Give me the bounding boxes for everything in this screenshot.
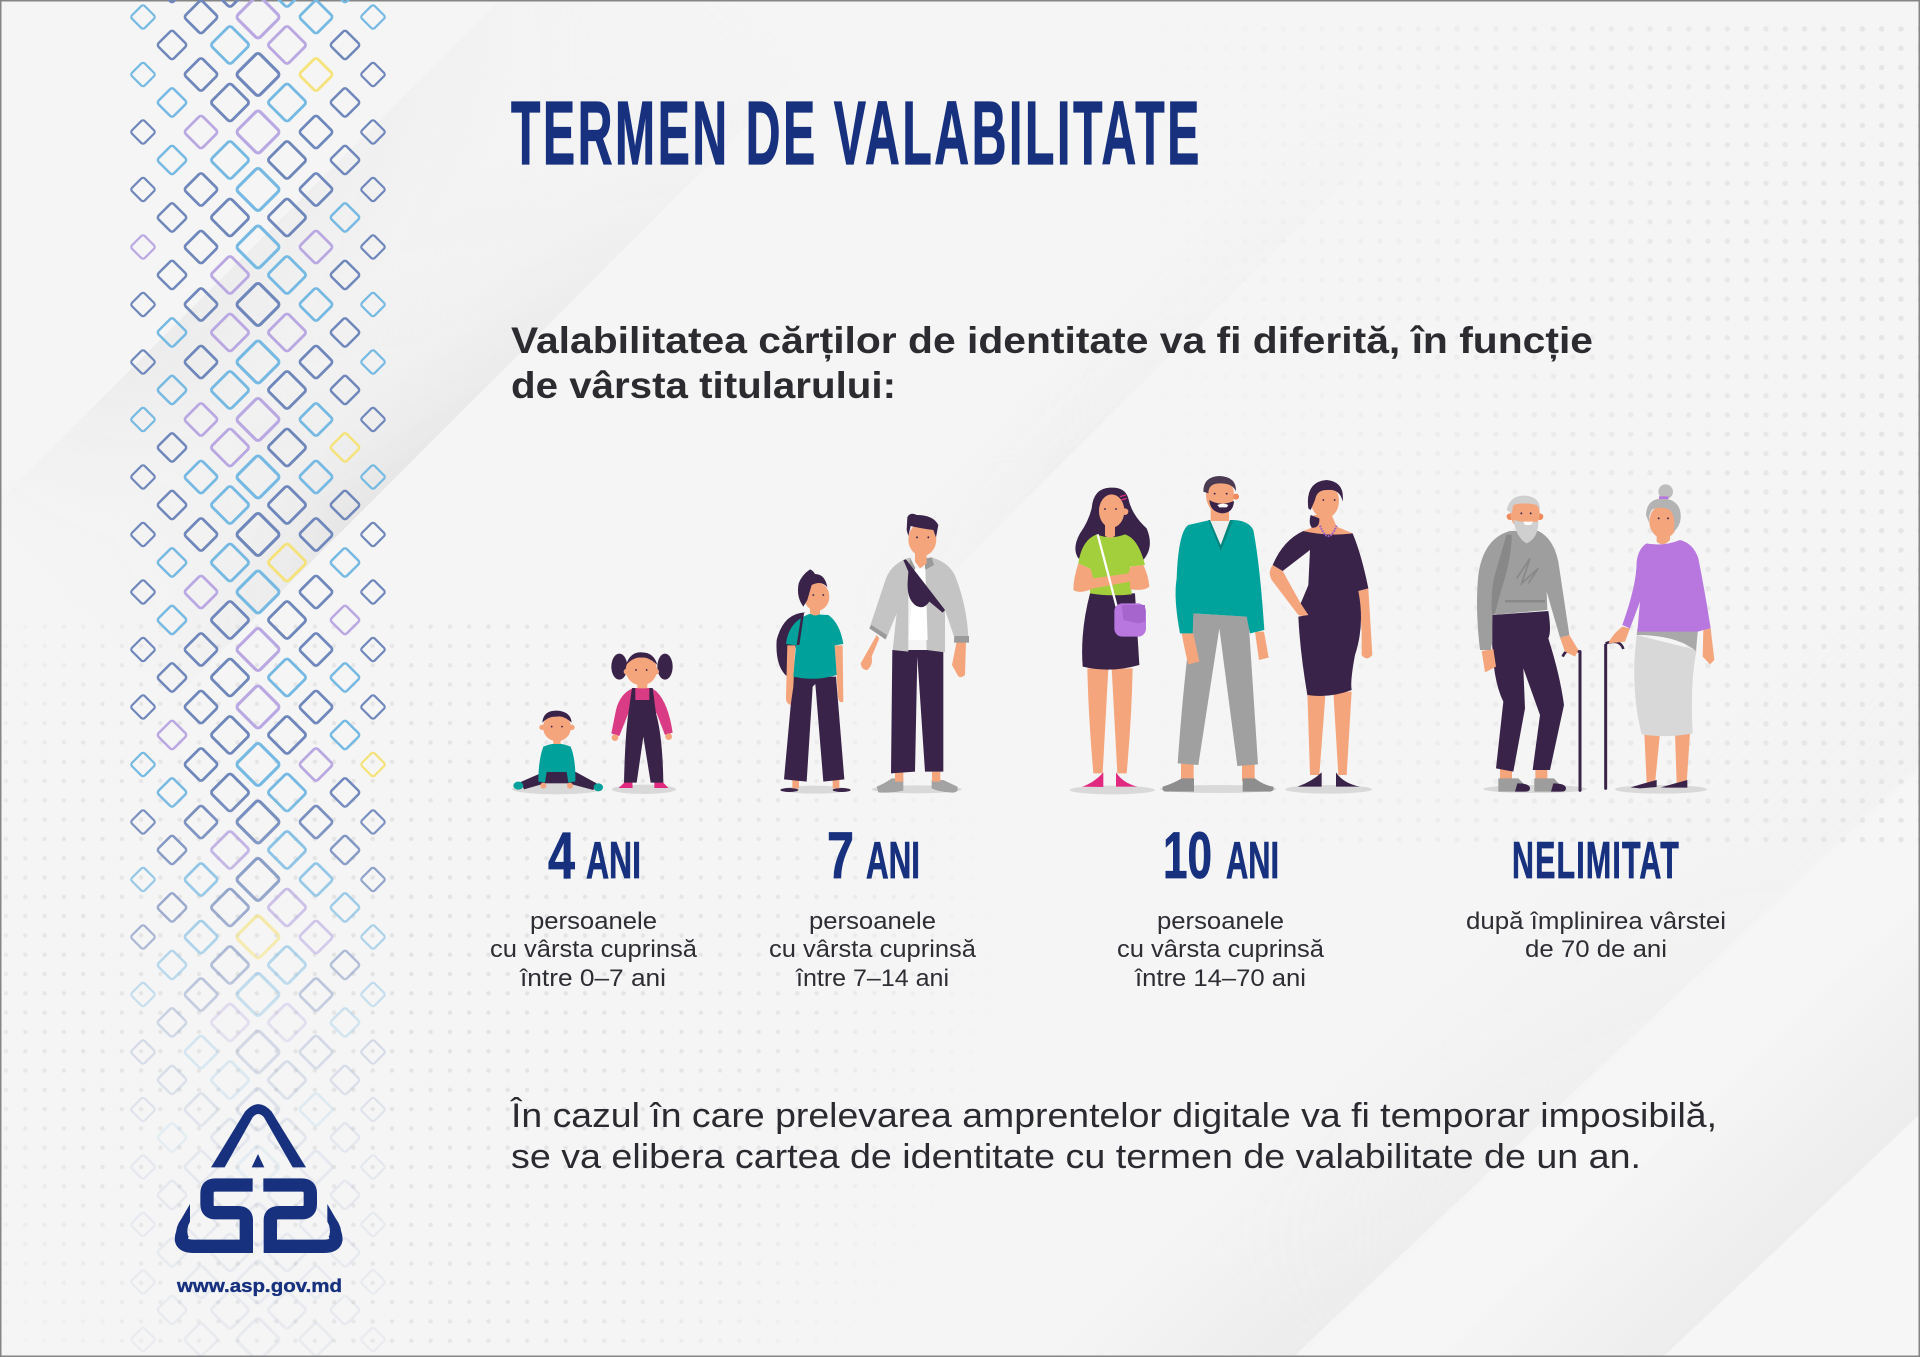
footnote: se va elibera cartea de identitate cu termen de valabilitate de un an.: [511, 1138, 1641, 1176]
validity label: 7 ani: 7: [827, 818, 854, 892]
description: 7-14: între 7–14 ani: [795, 965, 949, 992]
illustration: elderly couple: [1477, 484, 1714, 794]
illustration: baby and little girl: [512, 652, 676, 794]
adult woman in dark dress: [1270, 480, 1372, 794]
diamond pattern column: [130, 0, 386, 1357]
website url: www.asp.gov.md: [176, 1276, 342, 1296]
description: after 70: de 70 de ani: [1525, 936, 1667, 963]
description: 0-7: [490, 908, 698, 992]
validity label: nelimitat: NELIMITAT: [1512, 832, 1680, 890]
description: 14-70: persoanele: [1157, 908, 1284, 935]
validity label: 7 ani: ANI: [866, 832, 920, 890]
validity label: 7 ani: [827, 818, 920, 892]
elderly woman with cane: [1606, 484, 1714, 794]
subtitle: de vârsta titularului:: [511, 365, 896, 406]
validity label: 4 ani: [548, 818, 641, 892]
description: 0-7: cu vârsta cuprinsă: [490, 936, 698, 963]
description: after 70: [1466, 908, 1726, 963]
logo: ASP: [176, 1104, 341, 1246]
illustration: schoolboy and teenager: [776, 514, 969, 794]
description: 14-70: cu vârsta cuprinsă: [1117, 936, 1325, 963]
adult man in teal sweater: [1160, 476, 1277, 793]
description: after 70: după împlinirea vârstei: [1466, 908, 1726, 935]
illustration: three adults: [1070, 476, 1372, 794]
description: 14-70: [1117, 908, 1325, 992]
subtitle: Valabilitatea cărților de identitate va fi diferită, în funcție: [511, 320, 1593, 362]
footnote: [510, 1097, 1717, 1176]
validity label: 4 ani: 4: [548, 818, 575, 892]
description: 0-7: între 0–7 ani: [519, 965, 666, 992]
description: 7-14: persoanele: [809, 908, 936, 935]
description: 14-70: între 14–70 ani: [1134, 965, 1306, 992]
elderly man with cane: [1477, 496, 1587, 793]
description: 7-14: [769, 908, 977, 992]
description: 7-14: cu vârsta cuprinsă: [769, 936, 977, 963]
adult woman in green top: [1070, 488, 1155, 794]
footnote: În cazul în care prelevarea amprentelor digitale va fi temporar imposibilă,: [510, 1097, 1717, 1135]
validity label: 10 ani: 10: [1163, 818, 1212, 892]
subtitle: [511, 320, 1593, 406]
validity label: 4 ani: ANI: [586, 832, 641, 890]
description: 0-7: persoanele: [530, 908, 657, 935]
title: TERMEN DE VALABILITATE: [511, 84, 1202, 184]
validity label: 10 ani: ANI: [1226, 832, 1279, 890]
validity label: 10 ani: [1163, 818, 1279, 892]
